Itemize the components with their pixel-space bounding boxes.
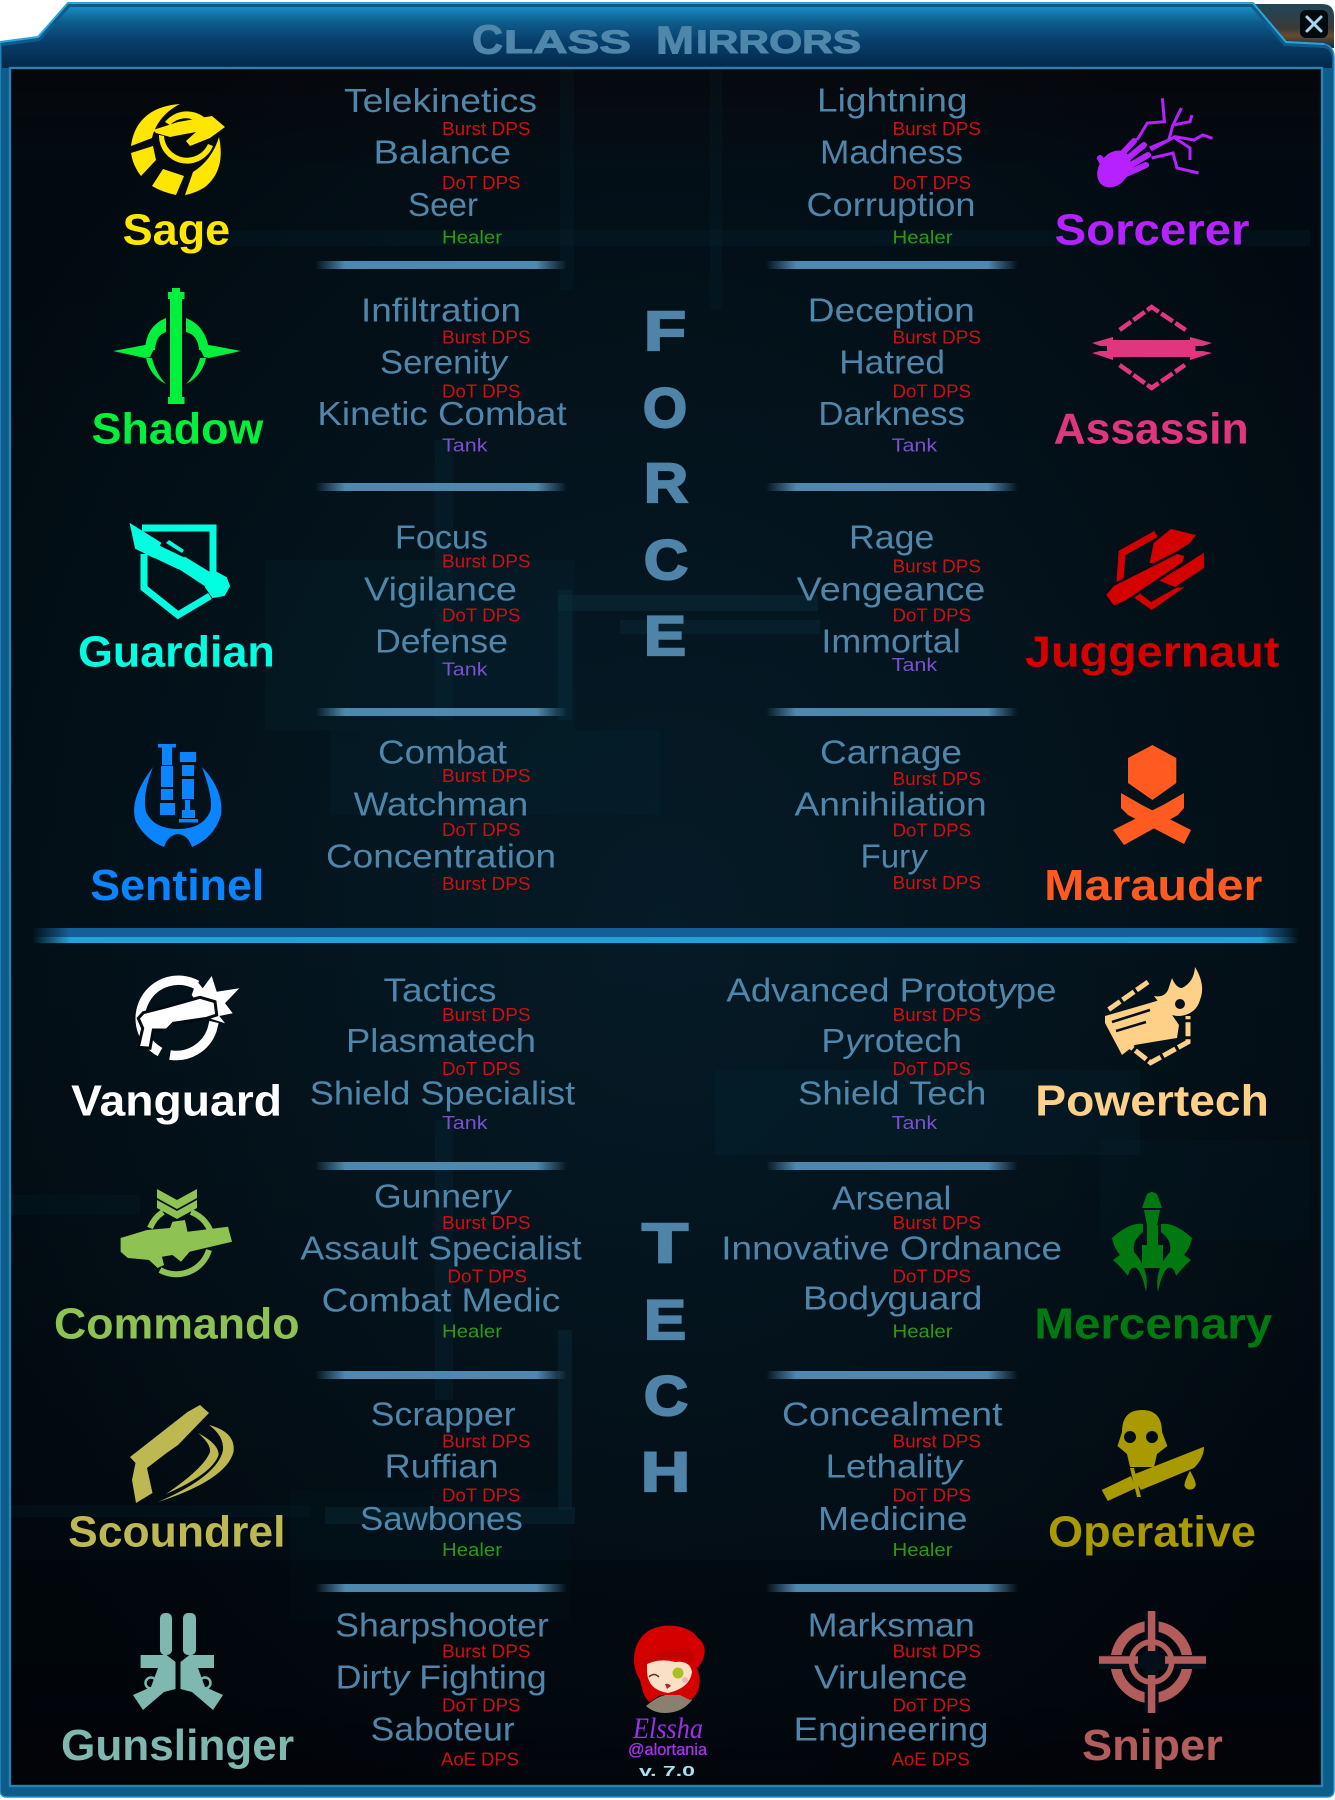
title: LASS xyxy=(504,24,631,60)
panel: Assassin xyxy=(808,292,1249,456)
spec: Combat Medic xyxy=(322,1282,560,1341)
spec: Concentration: Burst DPS xyxy=(442,873,530,894)
class name: Sentinel: Sentinel xyxy=(90,861,264,910)
icon: Sentinel xyxy=(134,744,221,847)
spec: Vengeance: Vengeance xyxy=(797,570,985,607)
spec: Seer: Seer xyxy=(408,186,478,223)
spec: Sharpshooter: Burst DPS xyxy=(442,1641,530,1662)
spec: Pyrotech: Pyrotech xyxy=(821,1022,962,1059)
icon: Mercenary xyxy=(1112,1192,1192,1292)
spec: Rage: Rage xyxy=(849,519,934,556)
spec: Corruption xyxy=(806,186,976,247)
spec: Shield Tech: Tank xyxy=(892,1112,938,1133)
spec: Ruffian: Ruffian xyxy=(385,1448,498,1485)
spec: Kinetic Combat: Tank xyxy=(442,435,488,456)
spec: Darkness: Tank xyxy=(892,435,938,456)
spec: Sawbones: Healer xyxy=(442,1539,502,1560)
class name: Juggernaut: Juggernaut xyxy=(1025,628,1280,677)
spec: Carnage xyxy=(820,734,981,789)
icon: Juggernaut xyxy=(1105,529,1204,610)
spec: Engineering xyxy=(794,1710,988,1770)
spec list: Marauder xyxy=(794,734,987,893)
panel: Guardian xyxy=(78,519,530,680)
spec: Darkness xyxy=(818,395,965,456)
spec: Carnage: Carnage xyxy=(820,734,962,771)
spec: Seer: Healer xyxy=(442,226,502,247)
spec: Marksman: Burst DPS xyxy=(892,1641,981,1662)
icon: Commando xyxy=(121,1189,232,1274)
spec: Medicine xyxy=(818,1500,968,1560)
spec: Telekinetics xyxy=(344,82,537,139)
spec: Hatred: DoT DPS xyxy=(892,380,971,401)
panel: Sorcerer xyxy=(806,82,1250,254)
spec: Balance xyxy=(374,134,520,193)
spec: Concealment xyxy=(782,1395,1002,1452)
spec: Balance: Balance xyxy=(374,134,511,171)
spec: Vigilance xyxy=(364,570,520,626)
spec: Scrapper: Burst DPS xyxy=(442,1431,530,1452)
spec list: Sage xyxy=(344,82,537,247)
class name: Mercenary: Mercenary xyxy=(1034,1299,1273,1348)
icon: Assassin xyxy=(1092,307,1212,388)
spec: Marksman: Marksman xyxy=(808,1607,975,1644)
panel: Commando xyxy=(54,1178,582,1348)
spec list: Gunslinger xyxy=(335,1607,549,1770)
spec: Tactics xyxy=(384,972,530,1025)
spec: Arsenal: Arsenal xyxy=(832,1179,951,1216)
panel: Shadow xyxy=(92,288,567,456)
spec: Combat: Burst DPS xyxy=(442,765,530,786)
icon: Guardian xyxy=(131,525,229,615)
class name: Guardian: Guardian xyxy=(78,628,275,677)
spec: Assault Specialist: Assault Specialist xyxy=(300,1229,582,1266)
spec: Shield Specialist xyxy=(310,1074,575,1133)
panel: Scoundrel xyxy=(68,1395,530,1560)
spec list: Assassin xyxy=(808,292,981,456)
spec: Combat: Combat xyxy=(378,734,507,771)
spec: Madness: DoT DPS xyxy=(892,172,971,193)
spec: Shield Tech: Shield Tech xyxy=(798,1074,986,1111)
spec: Innovative Ordnance xyxy=(721,1229,1062,1287)
icon: close button xyxy=(1300,10,1328,38)
title: C xyxy=(472,16,503,62)
spec: Pyrotech: DoT DPS xyxy=(892,1058,971,1079)
spec: Annihilation: DoT DPS xyxy=(892,820,971,841)
spec: Ruffian: DoT DPS xyxy=(442,1485,520,1506)
signature: Elssha xyxy=(632,1712,703,1745)
spec: Concentration: Concentration xyxy=(326,838,556,875)
class name: Marauder: Marauder xyxy=(1044,861,1262,910)
panel: Sentinel xyxy=(90,734,556,910)
class name: Scoundrel: Scoundrel xyxy=(68,1508,286,1557)
spec: Fury xyxy=(861,838,981,893)
spec: Serenity: Serenity xyxy=(380,343,510,380)
spec: Innovative Ordnance: DoT DPS xyxy=(892,1266,971,1287)
panel: Sage xyxy=(123,82,537,254)
class name: Commando: Commando xyxy=(54,1299,300,1348)
spec: Focus: Burst DPS xyxy=(442,551,530,572)
spec: Engineering: AoE DPS xyxy=(892,1749,970,1770)
spec list: Operative xyxy=(782,1395,1002,1560)
spec: Hatred xyxy=(839,343,971,401)
spec: Scrapper: Scrapper xyxy=(371,1395,516,1432)
spec: Kinetic Combat: Kinetic Combat xyxy=(317,395,567,432)
class name: Operative: Operative xyxy=(1048,1508,1256,1557)
class name: Sage: Sage xyxy=(123,205,230,254)
icon: Sage xyxy=(131,104,225,195)
spec: Seer xyxy=(408,186,502,247)
title xyxy=(472,16,861,62)
heading: FORCE: R xyxy=(644,451,688,514)
spec: Arsenal xyxy=(832,1179,981,1233)
spec: Vengeance: DoT DPS xyxy=(892,605,971,626)
icon: Sniper xyxy=(1099,1611,1206,1713)
spec: Lightning: Lightning xyxy=(817,82,968,119)
spec: Bodyguard: Bodyguard xyxy=(803,1279,982,1316)
class name: Gunslinger: Gunslinger xyxy=(61,1721,294,1770)
spec list: Sniper xyxy=(794,1607,988,1770)
spec: Engineering: Engineering xyxy=(794,1710,988,1747)
heading: FORCE: F xyxy=(644,299,686,362)
spec: Virulence: DoT DPS xyxy=(892,1695,971,1716)
heading: TECH xyxy=(641,1211,690,1503)
spec: Lethality: DoT DPS xyxy=(892,1485,971,1506)
spec: Shield Specialist: Tank xyxy=(442,1112,488,1133)
class name: Assassin: Assassin xyxy=(1054,404,1249,453)
version: v. 7.0 xyxy=(639,1763,695,1780)
spec: Rage xyxy=(849,519,981,577)
spec: Advanced Prototype: Advanced Protot ype xyxy=(726,972,1057,1009)
spec: Deception: Deception xyxy=(808,292,975,329)
spec: Fury: Fury xyxy=(861,838,929,875)
heading: TECH: H xyxy=(641,1440,690,1503)
panel: Mercenary xyxy=(721,1179,1273,1348)
spec list: Shadow xyxy=(317,292,567,456)
spec list: Vanguard xyxy=(310,972,575,1133)
icon: Gunslinger xyxy=(133,1613,223,1710)
spec list: Scoundrel xyxy=(360,1395,530,1560)
spec: Immortal: Tank xyxy=(892,654,938,675)
spec list: Commando xyxy=(300,1178,582,1341)
spec: Hatred: Hatred xyxy=(839,343,945,380)
spec: Combat Medic: Healer xyxy=(442,1320,502,1341)
spec: Telekinetics: Telekinetics xyxy=(344,82,537,119)
spec: Combat Medic: Combat Medic xyxy=(322,1282,560,1319)
spec: Defense xyxy=(375,623,508,680)
spec: Saboteur: AoE DPS xyxy=(441,1749,519,1770)
spec: Advanced Prototype: Burst DPS xyxy=(892,1004,981,1025)
spec: Annihilation: Annihilation xyxy=(794,785,987,822)
spec: Bodyguard xyxy=(803,1279,982,1341)
spec: Innovative Ordnance: Innovative Ordnance xyxy=(721,1229,1062,1266)
handle: @alortania xyxy=(628,1740,708,1759)
heading: FORCE: E xyxy=(644,604,686,667)
spec list: Guardian xyxy=(364,519,530,680)
spec: Tactics: Burst DPS xyxy=(442,1004,530,1025)
spec: Rage: Burst DPS xyxy=(892,556,981,577)
icon: Scoundrel xyxy=(130,1405,234,1503)
panel: Operative xyxy=(782,1395,1256,1560)
icon: Marauder xyxy=(1113,745,1191,845)
spec: Dirty Fighting: DoT DPS xyxy=(442,1695,520,1716)
spec: Virulence xyxy=(814,1658,971,1716)
spec: Bodyguard: Healer xyxy=(892,1320,952,1341)
spec: Watchman xyxy=(354,785,528,840)
spec: Scrapper xyxy=(371,1395,530,1452)
spec list: Juggernaut xyxy=(797,519,985,675)
spec: Gunnery xyxy=(374,1178,530,1233)
panel: Gunslinger xyxy=(61,1607,549,1770)
class name: Vanguard: Vanguard xyxy=(71,1077,282,1126)
spec: Lethality: Lethalit y xyxy=(826,1448,965,1485)
spec: Darkness: Darkness xyxy=(818,395,965,432)
spec: Sharpshooter: Sharpshooter xyxy=(335,1607,549,1644)
spec: Lethality xyxy=(826,1448,971,1506)
spec: Saboteur xyxy=(371,1710,519,1770)
spec: Immortal: Immortal xyxy=(821,623,961,660)
spec list: Powertech xyxy=(726,972,1057,1133)
spec: Lightning: Burst DPS xyxy=(892,118,981,139)
spec: Ruffian xyxy=(385,1448,520,1506)
spec: Serenity: DoT DPS xyxy=(442,380,520,401)
title: IRRORS xyxy=(696,24,861,60)
spec: Infiltration xyxy=(361,292,530,348)
spec: Carnage: Burst DPS xyxy=(892,768,981,789)
spec list: Mercenary xyxy=(721,1179,1062,1341)
panel: Sniper xyxy=(794,1607,1223,1770)
spec: Madness xyxy=(820,134,971,193)
spec: Shield Tech xyxy=(798,1074,986,1133)
spec: Concealment: Concealment xyxy=(782,1395,1002,1432)
spec: Assault Specialist xyxy=(300,1229,582,1287)
spec: Focus xyxy=(395,519,530,572)
spec list: Sorcerer xyxy=(806,82,981,247)
spec: Saboteur: Saboteur xyxy=(371,1710,515,1747)
spec: Marksman xyxy=(808,1607,981,1662)
spec: Sawbones xyxy=(360,1500,523,1560)
heading: TECH: C xyxy=(644,1364,688,1427)
heading: TECH: T xyxy=(642,1211,688,1274)
class name: Sniper: Sniper xyxy=(1082,1721,1223,1770)
spec: Gunnery: Burst DPS xyxy=(442,1212,530,1233)
spec list: Sentinel xyxy=(326,734,556,894)
spec: Assault Specialist: DoT DPS xyxy=(447,1266,527,1287)
spec: Concealment: Burst DPS xyxy=(892,1431,981,1452)
spec: Infiltration: Burst DPS xyxy=(442,327,530,348)
spec: Gunnery: Gunner y xyxy=(374,1178,513,1215)
spec: Tactics: Tactics xyxy=(384,972,496,1009)
spec: Corruption: Corruption xyxy=(806,186,976,223)
heading: TECH: E xyxy=(644,1288,686,1351)
spec: Defense: Defense xyxy=(375,623,508,660)
icon: Operative xyxy=(1102,1410,1204,1501)
spec: Shield Specialist: Shield Specialist xyxy=(310,1074,575,1111)
spec: Plasmatech: DoT DPS xyxy=(442,1058,520,1079)
icon: avatar xyxy=(634,1626,705,1713)
spec: Combat xyxy=(378,734,530,786)
spec: Infiltration: Infiltration xyxy=(361,292,521,329)
spec: Annihilation xyxy=(794,785,987,841)
spec: Medicine: Medicine xyxy=(818,1500,968,1537)
spec: Virulence: Virulence xyxy=(814,1658,968,1695)
spec: Corruption: Healer xyxy=(892,226,952,247)
author credit xyxy=(628,1626,708,1780)
spec: Telekinetics: Burst DPS xyxy=(442,118,530,139)
spec: Madness: Madness xyxy=(820,134,963,171)
spec: Pyrotech xyxy=(821,1022,971,1079)
spec: Deception xyxy=(808,292,981,348)
spec: Advanced Prototype xyxy=(726,972,1057,1025)
spec: Plasmatech xyxy=(346,1022,536,1079)
spec: Deception: Burst DPS xyxy=(892,327,981,348)
spec: Balance: DoT DPS xyxy=(442,172,520,193)
spec: Serenity xyxy=(380,343,520,401)
panel: Powertech xyxy=(726,967,1269,1133)
spec: Watchman: Watchman xyxy=(354,785,528,822)
class name: Powertech: Powertech xyxy=(1035,1077,1269,1126)
heading: FORCE: O xyxy=(643,376,687,439)
spec: Concentration xyxy=(326,838,556,894)
spec: Lightning xyxy=(817,82,981,139)
panel: Juggernaut xyxy=(797,519,1280,677)
spec: Vengeance xyxy=(797,570,985,626)
spec: Fury: Burst DPS xyxy=(892,872,981,893)
spec: Kinetic Combat xyxy=(317,395,567,456)
icon: Powertech xyxy=(1105,967,1202,1063)
class name: Shadow: Shadow xyxy=(92,404,264,453)
panel: Marauder xyxy=(794,734,1262,910)
title: M xyxy=(656,20,694,62)
spec: Immortal xyxy=(821,623,961,675)
spec: Dirty Fighting xyxy=(336,1658,547,1716)
spec: Vigilance: DoT DPS xyxy=(442,605,520,626)
spec: Focus: Focus xyxy=(395,519,488,556)
spec: Defense: Tank xyxy=(442,659,488,680)
panel: Vanguard xyxy=(71,972,575,1133)
spec: Medicine: Healer xyxy=(892,1539,952,1560)
class name: Sorcerer: Sorcerer xyxy=(1054,205,1250,254)
spec: Plasmatech: Plasmatech xyxy=(346,1022,536,1059)
spec: Vigilance: Vigilance xyxy=(364,570,517,607)
spec: Dirty Fighting: Dirty Fighting xyxy=(336,1658,547,1695)
icon: Shadow xyxy=(113,288,241,404)
icon: Vanguard xyxy=(138,976,239,1055)
spec: Watchman: DoT DPS xyxy=(442,819,520,840)
spec: Sawbones: Sawbones xyxy=(360,1500,523,1537)
heading: FORCE xyxy=(643,299,688,667)
icon: Sorcerer xyxy=(1090,98,1212,194)
spec: Sharpshooter xyxy=(335,1607,549,1662)
spec: Arsenal: Burst DPS xyxy=(892,1212,981,1233)
heading: FORCE: C xyxy=(644,528,688,591)
